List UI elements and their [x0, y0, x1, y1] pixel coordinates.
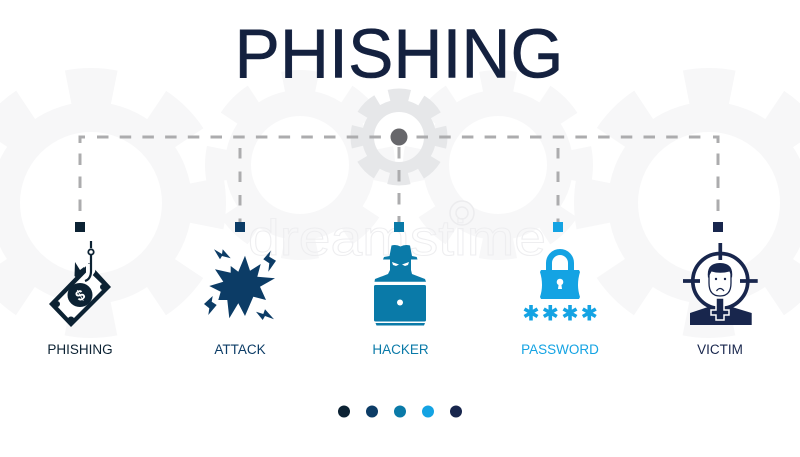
- label: victim: VICTIM: [697, 342, 743, 357]
- background gears: [0, 81, 800, 320]
- label: phishing: PHISHING: [47, 342, 113, 357]
- icon: password padlock: [524, 252, 596, 320]
- watermark: dreamstime: [248, 210, 546, 266]
- label: password: PASSWORD: [521, 342, 599, 357]
- dashed connectors: [78, 137, 720, 222]
- label: attack: ATTACK: [214, 342, 266, 357]
- title: PHISHING: [234, 14, 564, 92]
- pagination dots: [338, 406, 462, 418]
- label: hacker: HACKER: [372, 342, 429, 357]
- icon: phishing hook and banknote: $: [73, 286, 89, 305]
- icon: attack explosion: [204, 249, 276, 320]
- center gear: [358, 96, 440, 178]
- icon: phishing hook and banknote: [49, 241, 111, 327]
- icon: victim in crosshair: [683, 243, 758, 325]
- connector node squares: [75, 222, 723, 232]
- icon: hacker at laptop: [374, 245, 426, 326]
- center hub dot: [390, 128, 408, 146]
